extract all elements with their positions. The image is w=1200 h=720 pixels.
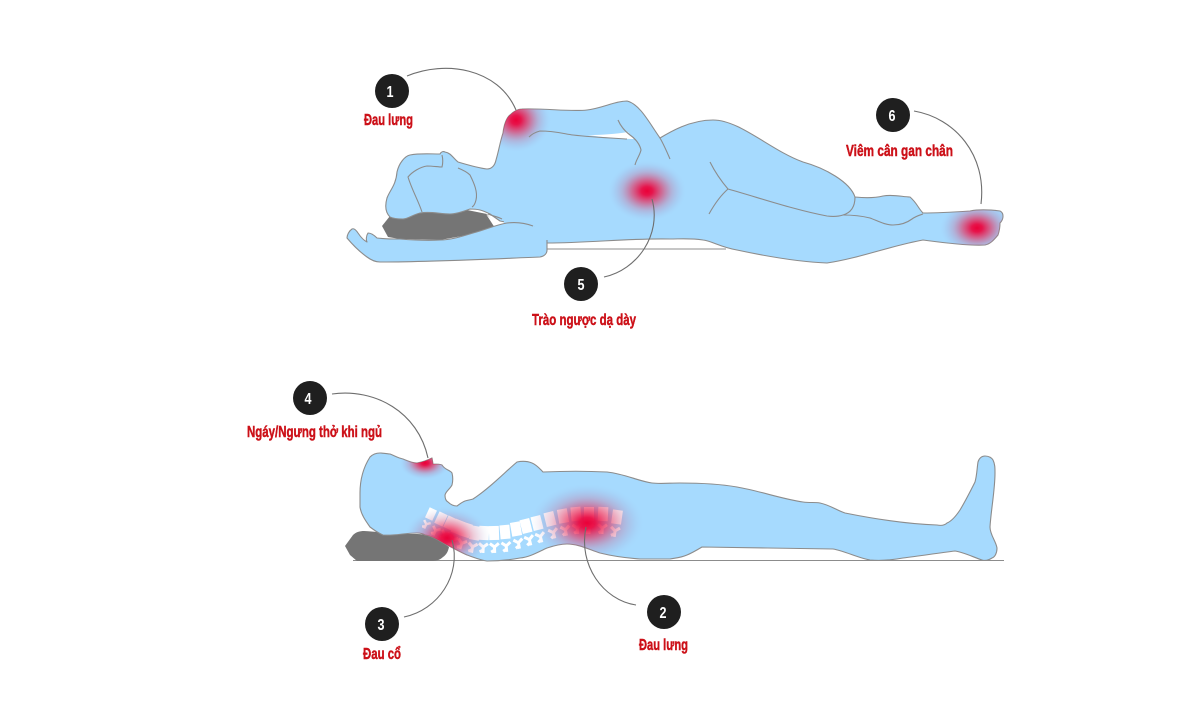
- callout 3: 3: [378, 617, 385, 634]
- callout 6: [846, 98, 982, 204]
- body inner lines: [408, 120, 923, 225]
- leader line 5: [604, 199, 654, 277]
- leader line 4: [332, 393, 428, 458]
- callout 5: 5: [578, 277, 585, 294]
- pillow: top figure: [382, 210, 497, 240]
- leader line 1: [407, 68, 516, 110]
- ground line: bottom figure: [353, 560, 1004, 562]
- callout 5: Trào ngược dạ dày: [532, 312, 636, 329]
- callout 4: Ngáy/Ngưng thở khi ngủ: [247, 424, 382, 441]
- figure: side sleeping: [347, 87, 1015, 263]
- callout 1: 1: [386, 84, 394, 101]
- callout 3: Đau cổ: [363, 645, 401, 663]
- body silhouette: [360, 453, 997, 561]
- pain glow: stomach: [607, 160, 687, 222]
- pillow: bottom figure: [345, 531, 449, 561]
- ground line: top figure: [540, 248, 726, 250]
- spine: [421, 507, 623, 554]
- body silhouette: [386, 101, 1003, 263]
- pain glow: foot: [945, 210, 1002, 246]
- figure: back sleeping: [345, 452, 998, 562]
- callout 3: [363, 540, 454, 663]
- leader line 6: [914, 111, 982, 204]
- arm: [347, 223, 547, 262]
- callout 1: [364, 68, 516, 129]
- callout 5: [532, 199, 654, 329]
- callout 6: 6: [888, 108, 896, 125]
- leader line 2: [584, 527, 636, 605]
- callout 4: 4: [304, 391, 312, 408]
- callout 6: Viêm cân gan chân: [846, 143, 953, 160]
- callout 1: Đau lưng: [364, 112, 413, 129]
- pillow gap: [486, 214, 499, 228]
- pain glow: nose: [403, 458, 444, 478]
- arm gap: [588, 132, 634, 139]
- pain glow: lower back: [536, 490, 636, 554]
- leader line 3: [404, 540, 454, 617]
- stroke cover under arm: [504, 222, 534, 226]
- pain glow: neck: [411, 511, 486, 556]
- callout 4: [247, 381, 428, 458]
- callout 2: 2: [660, 605, 667, 622]
- callout 2: Đau lưng: [639, 637, 688, 654]
- pain glow: shoulder: [501, 108, 546, 148]
- callout 2: [584, 527, 688, 654]
